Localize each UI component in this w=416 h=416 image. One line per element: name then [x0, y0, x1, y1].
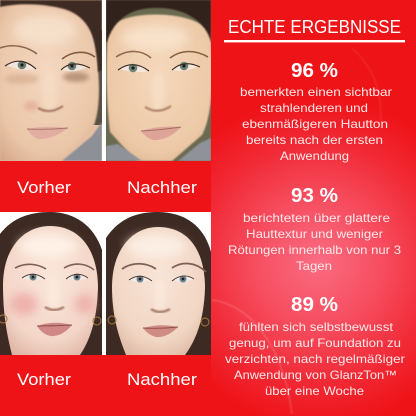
- caption: Vorher bottom: Vorher: [17, 370, 71, 389]
- heading: ECHTE ERGEBNISSE: [228, 17, 401, 37]
- stat: 93 %: Hauttextur und weniger: [246, 227, 383, 241]
- eyes: [129, 276, 194, 282]
- stat: 96 %: [240, 60, 392, 163]
- stat: 89 %: über eine Woche: [265, 384, 364, 398]
- stat: 96 %: bereits nach der ersten: [246, 133, 383, 147]
- stat: 89 %: Anwendung von GlanzTon™: [234, 368, 397, 382]
- stat: 89 %: [225, 294, 405, 398]
- panel: top caption band: [0, 161, 211, 212]
- caption: Nachher bottom: Nachher: [127, 370, 197, 389]
- panel: results: [211, 0, 416, 416]
- stat: 89 %: genug, um auf Foundation zu: [229, 336, 401, 350]
- stat: 96 %: 96 %: [291, 60, 338, 82]
- eyes: [5, 61, 90, 71]
- caption: Vorher top: Vorher: [17, 178, 71, 197]
- panel: bottom caption band: [0, 355, 211, 416]
- stat: 89 %: 89 %: [291, 294, 338, 316]
- photo: woman one after: [106, 0, 212, 161]
- stat: 93 %: Rötungen innerhalb von nur 3: [228, 243, 401, 257]
- brows: [15, 264, 46, 269]
- stat: 93 %: 93 %: [291, 185, 338, 207]
- stat: 96 %: strahlenderen und: [260, 101, 368, 115]
- stat: 93 %: berichteten über glattere: [243, 211, 390, 225]
- eyes: [22, 274, 88, 280]
- stat: 89 %: verzichten, nach regelmäßiger: [225, 352, 405, 366]
- photo: woman one before: [0, 0, 102, 161]
- stat: 96 %: bemerkten einen sichtbar: [240, 85, 392, 99]
- stat: 89 %: fühlten sich selbstbewusst: [239, 320, 394, 334]
- photo: woman two after: [106, 212, 211, 355]
- photo: woman two before: [0, 212, 102, 355]
- stat: 93 %: Tagen: [296, 259, 332, 273]
- brows: [116, 51, 151, 58]
- brows: [0, 46, 37, 54]
- stat: 96 %: ebenmäßigeren Hautton: [242, 117, 388, 131]
- stat: 96 %: Anwendung: [280, 149, 349, 163]
- stat: 93 %: [228, 185, 401, 273]
- eyes: [118, 62, 200, 72]
- caption: Nachher top: Nachher: [127, 178, 197, 197]
- brows: [122, 264, 156, 269]
